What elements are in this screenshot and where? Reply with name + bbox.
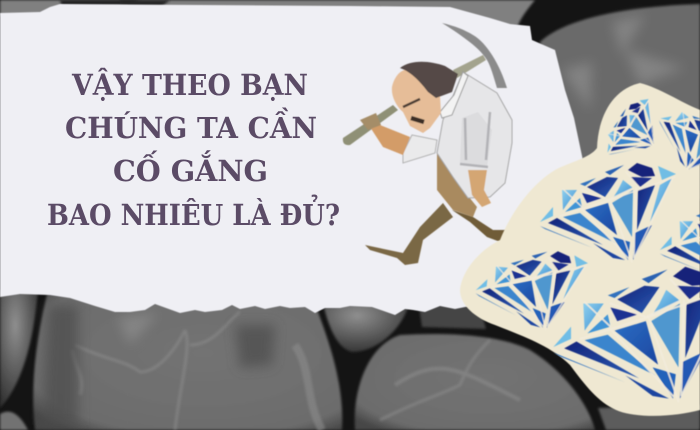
pickaxe handle: [453, 55, 486, 78]
rolled sleeve: [403, 135, 437, 163]
heading: question text: [47, 68, 340, 232]
necktie: [437, 153, 477, 217]
front leg: [365, 203, 453, 265]
hair: [400, 62, 458, 98]
panel: torn paper: [0, 4, 585, 315]
glasses: [403, 99, 420, 107]
stone: bottom right: [598, 405, 700, 430]
diamond: top small: [592, 95, 671, 169]
diamond: right edge: [660, 197, 700, 286]
shirt: [437, 72, 512, 198]
panel: cream diamond sticker: [460, 83, 700, 416]
stone: small centre: [322, 300, 410, 352]
back leg: [452, 210, 522, 243]
shirt folds: [460, 112, 490, 167]
moustache: [411, 118, 424, 122]
hand on grip: [360, 113, 381, 130]
forearm right: [468, 170, 491, 207]
icon: miner with pickaxe: [343, 23, 522, 265]
stone: small right: [418, 300, 486, 329]
heading: question text: CHÚNG TA CẦN: [65, 108, 317, 145]
diamond: top right small: [646, 92, 700, 186]
diamond: bottom right large: [553, 267, 700, 401]
pickaxe head: [442, 23, 507, 88]
forearm left: [370, 125, 410, 155]
shirt sleeve shading: [460, 112, 492, 167]
heading: question text: VẬY THEO BẠN: [71, 68, 308, 102]
stone: top right: [540, 4, 700, 200]
stone: bottom left: [0, 290, 38, 408]
diamond: bottom left: [472, 243, 589, 333]
stone: large centre right: [355, 334, 595, 430]
stone: lower left corner: [0, 412, 28, 430]
heading: question text: CỐ GẮNG: [113, 151, 268, 188]
pickaxe grip: [343, 105, 398, 145]
stone: top strip: [0, 0, 535, 26]
icon: blue diamonds: [472, 92, 700, 401]
stone texture veins: [72, 312, 520, 430]
head: [392, 70, 441, 133]
heading: question text: BAO NHIÊU LÀ ĐỦ?: [47, 195, 340, 232]
collar: [440, 72, 468, 118]
diamond: centre: [540, 163, 676, 262]
stone: large centre left: [33, 290, 342, 430]
